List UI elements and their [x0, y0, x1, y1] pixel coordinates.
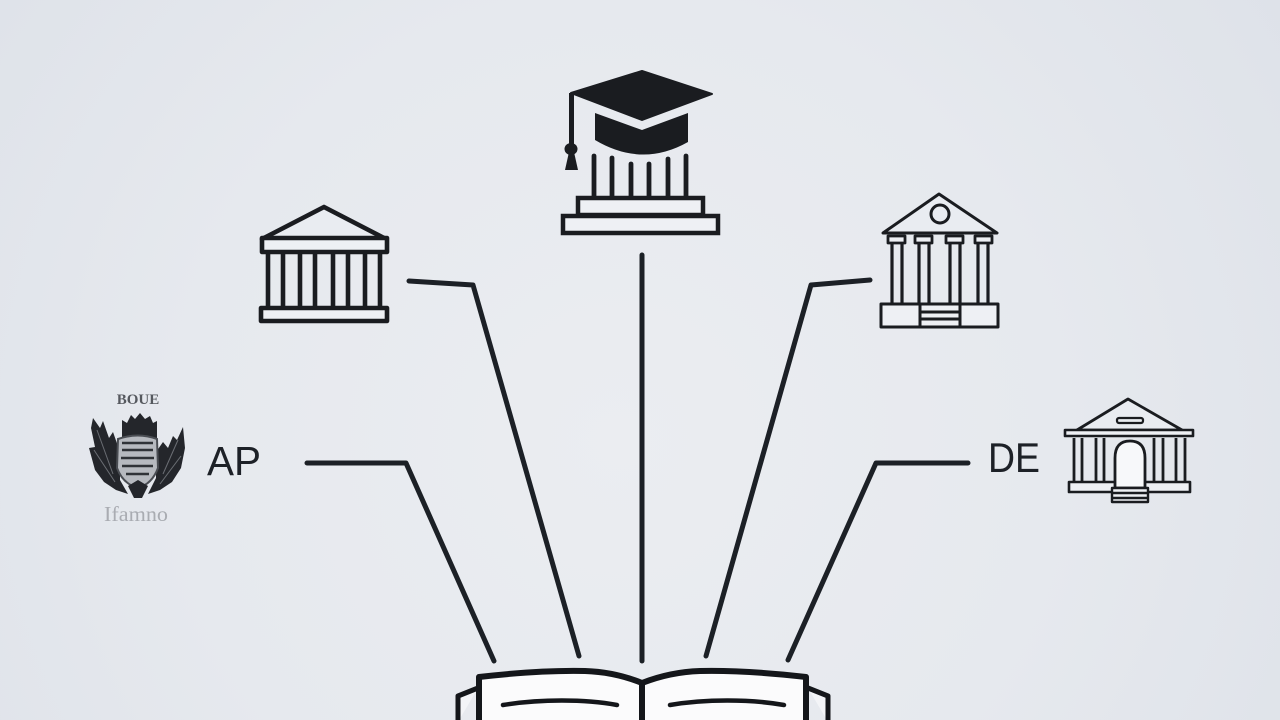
icon: left building [261, 207, 387, 321]
arched door [1115, 441, 1145, 488]
base and steps [881, 304, 998, 327]
columns [594, 156, 686, 198]
right page [642, 671, 806, 720]
steps [563, 198, 718, 233]
door steps [1112, 488, 1148, 502]
connector: book to AP crest [307, 463, 494, 661]
crest base [128, 480, 148, 498]
columns [1074, 438, 1185, 482]
pediment [262, 207, 386, 239]
shield [117, 436, 158, 488]
icon: DE building with arched door [1065, 399, 1193, 502]
connector: book to graduation cap [640, 255, 644, 661]
base [1069, 482, 1190, 492]
left wing [89, 418, 128, 494]
icon: graduation cap on steps [563, 71, 718, 233]
tassel [564, 93, 578, 170]
icon: winged crest [89, 392, 185, 526]
base [261, 308, 387, 321]
text line right [670, 700, 784, 705]
plaque [1117, 418, 1143, 423]
label: DE: DE [988, 434, 1040, 481]
icon: right building with columns [881, 194, 998, 327]
crest bottom text: Ifamno [104, 502, 168, 526]
wing feather lines [94, 430, 181, 484]
connector: book to right building [706, 280, 870, 656]
pediment circle [931, 205, 949, 223]
crown feathers [122, 413, 157, 440]
columns [892, 244, 988, 304]
cap underside [595, 113, 688, 155]
crest top text: BOUE [117, 392, 159, 408]
capitals [888, 236, 992, 243]
pediment [883, 194, 997, 233]
entablature [1065, 430, 1193, 436]
right wing [148, 427, 185, 494]
back pages [458, 688, 828, 720]
columns [268, 252, 380, 308]
left page [479, 671, 642, 720]
text line left [503, 700, 617, 705]
icon: open book [458, 671, 828, 720]
pediment [1077, 399, 1182, 430]
shield bands [121, 443, 154, 474]
connector: book to left building [409, 281, 579, 656]
label: AP: AP [207, 438, 261, 484]
entablature [262, 238, 387, 252]
connector: book to DE building [788, 463, 968, 660]
mortarboard [571, 71, 712, 120]
